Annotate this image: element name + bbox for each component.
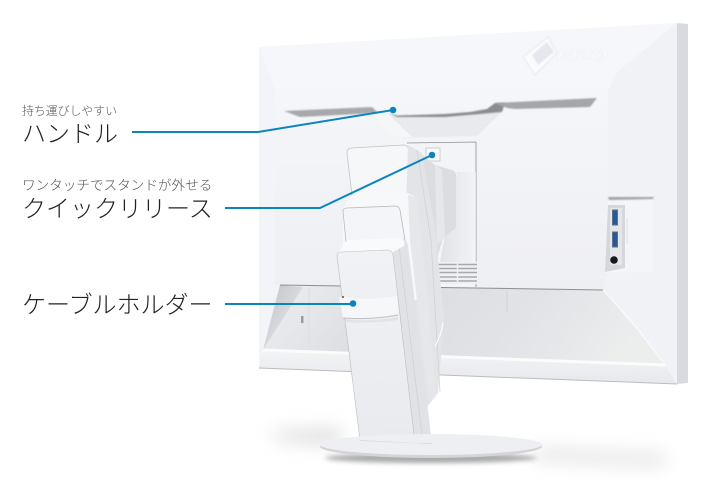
- lower recess: [263, 285, 665, 365]
- vents: [436, 262, 477, 284]
- right facet: [603, 23, 677, 384]
- notch: [370, 112, 502, 138]
- lower segment side: [393, 238, 432, 443]
- top facet shading: [259, 23, 677, 90]
- quick release button: [426, 148, 440, 161]
- handle: [284, 98, 597, 138]
- audio jack: [610, 256, 618, 264]
- side edge: [677, 23, 688, 384]
- main face: [275, 90, 608, 290]
- upper segment side: [408, 195, 436, 404]
- label: handle subtitle: 持ち運びしやすい: [22, 104, 117, 118]
- usb ports: [612, 210, 618, 225]
- upper segment top: [343, 193, 426, 300]
- hinge block: [412, 147, 456, 262]
- label: cable holder: ケーブルホルダー: [22, 292, 213, 319]
- lower lip: [259, 350, 677, 384]
- logo: EIZO: [557, 47, 607, 64]
- callout line: quick release: [225, 152, 435, 208]
- stand base: [320, 434, 542, 458]
- tilt tab: [347, 145, 420, 230]
- back panel: [259, 23, 677, 384]
- label: quick release: クイックリリース: [22, 196, 213, 223]
- right slot: [495, 98, 597, 109]
- floor shadow: [270, 428, 670, 466]
- lower segment front: [337, 250, 415, 443]
- logo: [523, 37, 607, 75]
- port recess: [605, 197, 654, 273]
- cable holder: [339, 296, 398, 323]
- callout line: handle: [132, 107, 396, 132]
- label: handle: ハンドル: [22, 121, 118, 148]
- lower segment cap: [337, 238, 404, 254]
- stand mount plate: [407, 142, 477, 287]
- rear column side: [405, 145, 444, 407]
- callout line: cable holder: [225, 300, 356, 307]
- stand column: [337, 145, 444, 443]
- left slot: [284, 107, 378, 117]
- lock slot: [301, 316, 304, 323]
- monitor body: [259, 23, 688, 384]
- label: quick release subtitle: ワンタッチでスタンドが外せる: [22, 178, 212, 193]
